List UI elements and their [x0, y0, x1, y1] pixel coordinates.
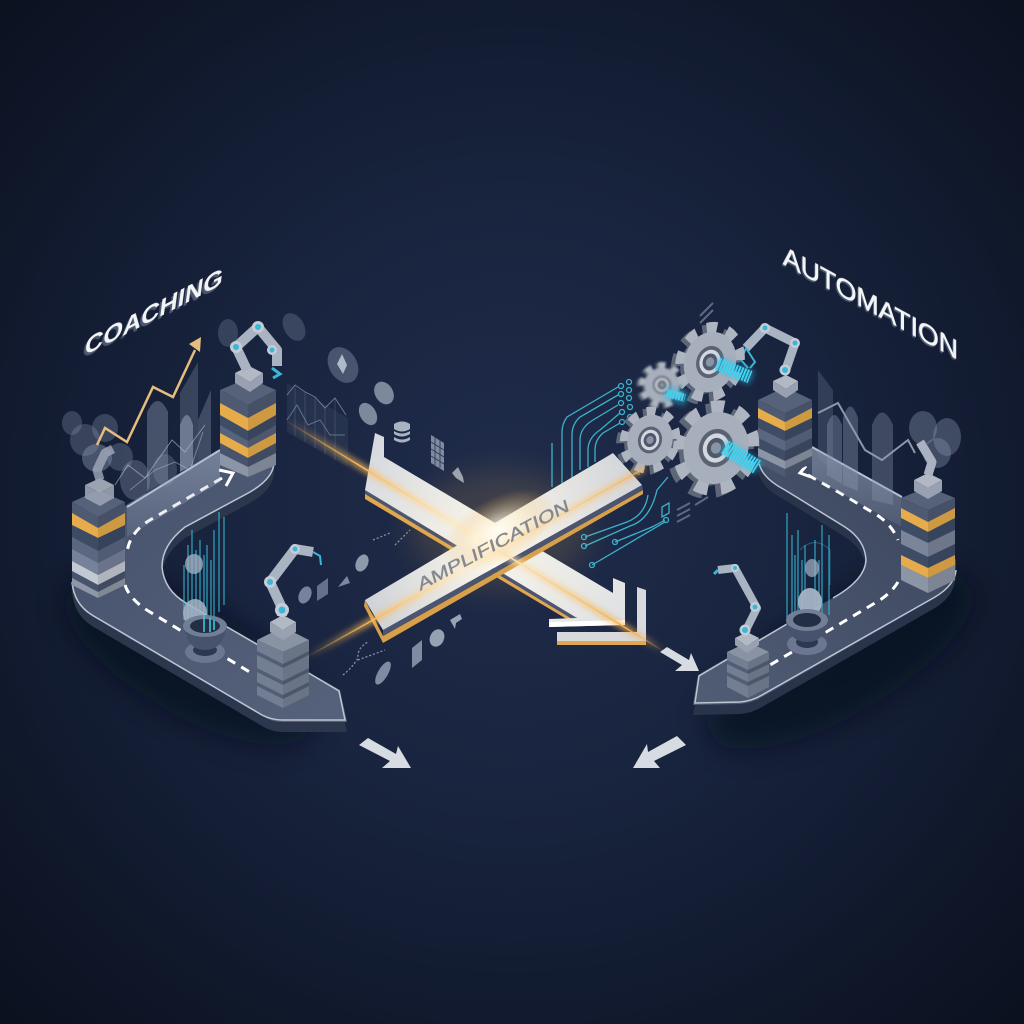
- coaching label: COACHING: [83, 263, 225, 362]
- glass chart panel: [812, 370, 961, 527]
- road shadow: [41, 542, 339, 778]
- glow halo: [410, 470, 590, 590]
- tower: lower: [727, 642, 769, 698]
- amplification cross: [285, 420, 665, 658]
- pedestal: coaching: [183, 615, 227, 663]
- light streaks: [285, 420, 665, 658]
- floating data fragments: lower left: [296, 530, 462, 687]
- output arrow: centre: [660, 647, 699, 671]
- dashed route with arrow: [125, 470, 253, 674]
- coaching roadmap: [41, 263, 347, 778]
- rising gold trend arrow: [97, 337, 201, 445]
- tick marks: [677, 303, 713, 522]
- gear: medium: [613, 403, 684, 479]
- cyan coils: [665, 363, 759, 468]
- diagonal bar: bottom left to top right: [364, 453, 643, 643]
- dashed route with arrow: [770, 466, 898, 665]
- output arrow: coaching: [359, 738, 411, 768]
- gear: top large: [667, 319, 749, 408]
- robot arm: top: [741, 323, 800, 398]
- automation label: AUTOMATION: [783, 241, 958, 366]
- tower: top: [220, 378, 276, 477]
- tower: left: [72, 490, 125, 598]
- tower: lower: [257, 627, 309, 708]
- central glow: [428, 472, 568, 588]
- robot arm: left translucent: [85, 449, 114, 506]
- floating line chart panel: [287, 383, 348, 467]
- hologram: coaching: [183, 512, 224, 634]
- amplification label: AMPLIFICATION: [416, 496, 571, 595]
- glass chart panel: [62, 362, 220, 537]
- tower: top: [758, 387, 812, 477]
- tower: right: [901, 487, 955, 593]
- output arrow: automation: [633, 736, 686, 768]
- circuit traces: lower: [582, 477, 669, 568]
- road: coaching: [72, 448, 347, 732]
- floating data fragments: upper left: [278, 309, 464, 483]
- gear: small: [634, 359, 687, 412]
- automation roadmap: [683, 241, 997, 783]
- pedestal: automation: [786, 609, 829, 655]
- diagonal arrow: top left to bottom right: [365, 433, 625, 627]
- robot arm: lower: [714, 564, 760, 653]
- gears: [613, 319, 764, 503]
- road shadow: [683, 537, 997, 783]
- gear: bottom large: [663, 396, 764, 503]
- robot arm: top: [218, 319, 280, 392]
- second chevron of arrow head: [557, 587, 646, 645]
- road: automation: [693, 440, 956, 715]
- circuit traces: upper: [552, 380, 632, 487]
- robot arm: right translucent: [914, 442, 942, 499]
- robot arm: lower: [264, 544, 321, 640]
- hologram: automation: [787, 513, 830, 625]
